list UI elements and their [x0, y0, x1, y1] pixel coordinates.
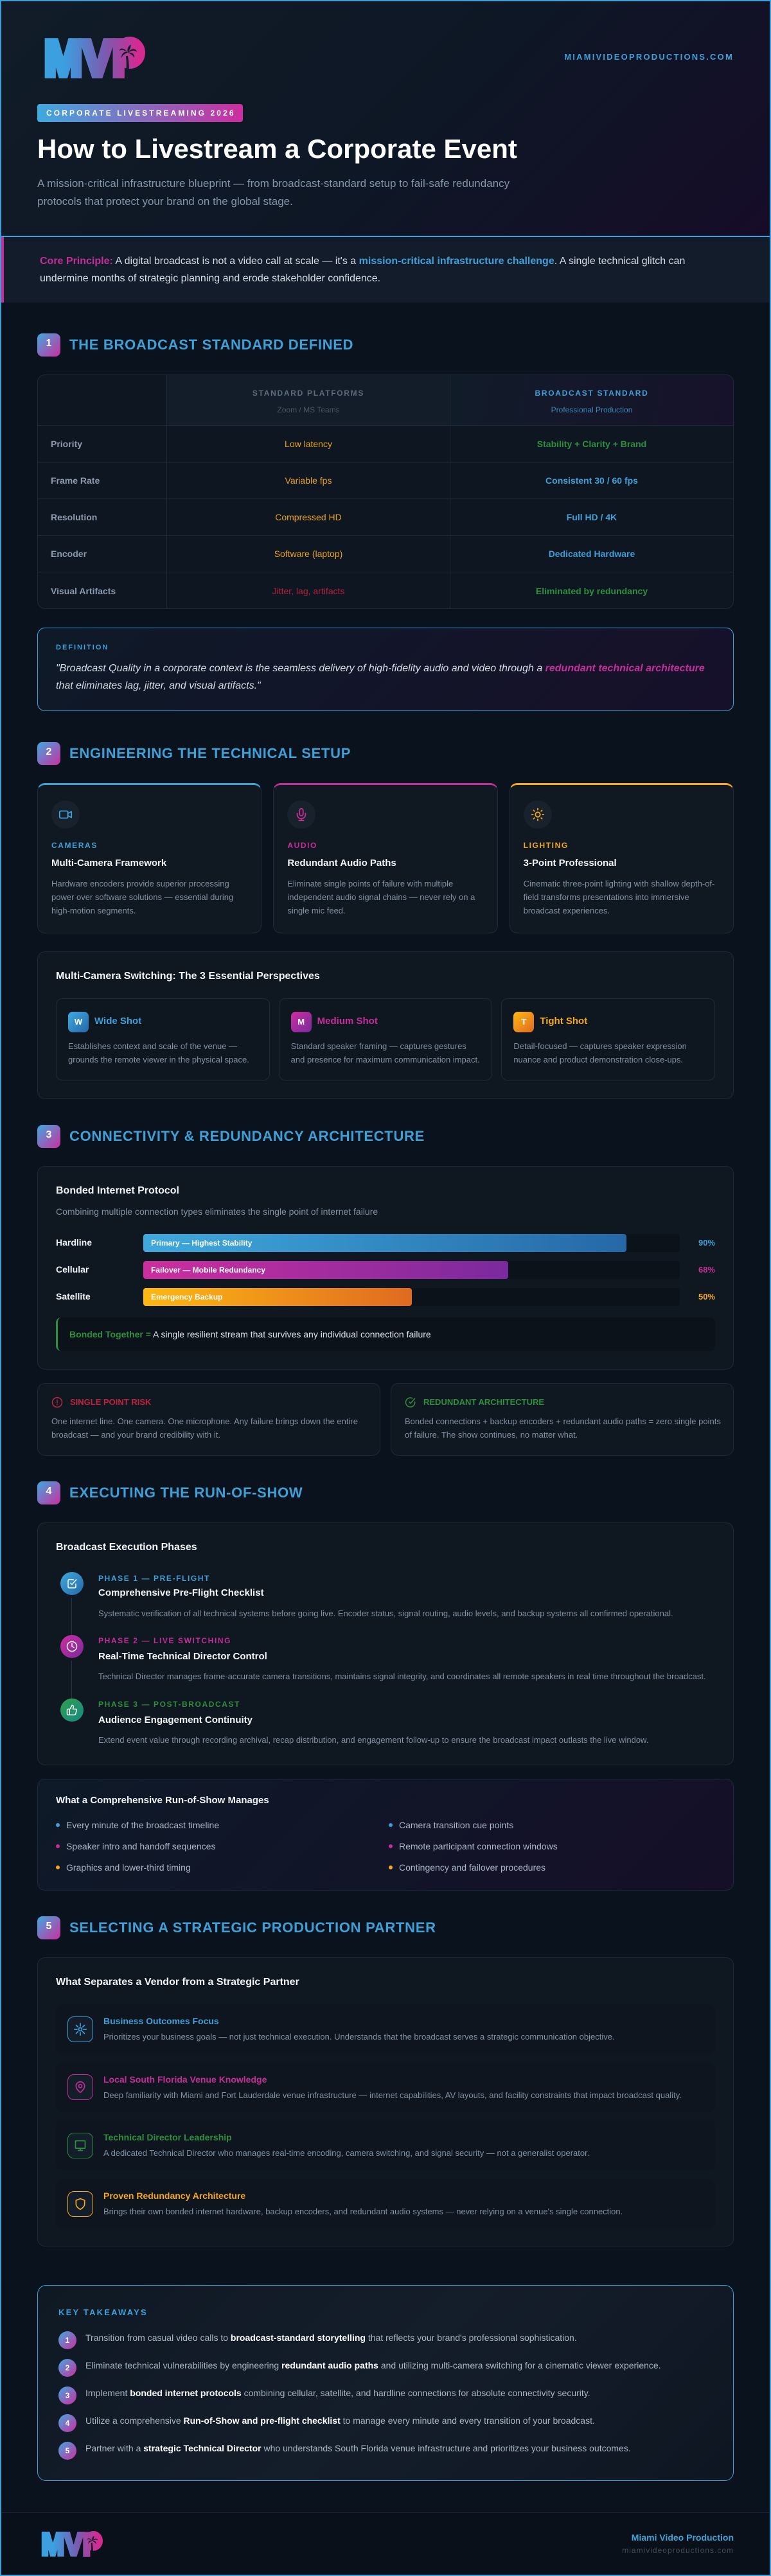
row: resolution [38, 499, 733, 536]
icon: alert [51, 1397, 63, 1408]
icon: sparkle [67, 2016, 93, 2042]
item: technical director [56, 2121, 715, 2170]
shot description [513, 1041, 687, 1064]
number [58, 2331, 76, 2349]
section heading: CONNECTIVITY & REDUNDANCY ARCHITECTURE [69, 1128, 425, 1144]
card: redundant architecture [391, 1383, 734, 1456]
phase description: Extend event value through recording archival, recap distribution, and engagement follow-up to ensure the broadcast impact outlasts the live window. [98, 1735, 648, 1745]
item: Speaker intro and handoff sequences [66, 1841, 215, 1851]
phase description: Systematic verification of all technical systems before going live. Encoder status, signal routing, audio levels, and backup systems all confirmed operational. [98, 1609, 673, 1618]
definition text: "Broadcast Quality in a corporate context is the seamless delivery of high-fidelity audio and video through a redundant technical architecture [56, 663, 705, 674]
key takeaways [37, 2285, 734, 2481]
phase title: Real-Time Technical Director Control [98, 1651, 267, 1662]
definition text [56, 663, 705, 691]
card: audio [273, 783, 498, 933]
description: single mic feed. [287, 906, 346, 915]
website address: MIAMIVIDEOPRODUCTIONS.COM [564, 52, 734, 62]
text: Implement bonded internet protocols combining cellular, satellite, and hardline connections for absolute connectivity security. [85, 2388, 590, 2398]
card: lighting [510, 783, 734, 933]
phase title: Audience Engagement Continuity [98, 1715, 253, 1725]
item title: Business Outcomes Focus [103, 2016, 219, 2026]
phase 3 [60, 1698, 648, 1745]
comparison table [37, 375, 734, 609]
bar: hardline: Primary — Highest Stability [151, 1239, 252, 1248]
row: visual artifacts [51, 572, 648, 608]
takeaways heading: KEY TAKEAWAYS [58, 2307, 148, 2317]
icon tile M [291, 1012, 312, 1032]
shot description: Detail-focused — captures speaker expression [513, 1041, 687, 1051]
row: visual artifacts: Eliminated by redundancy [536, 586, 648, 596]
shot description: grounds the remote viewer in the physical space. [68, 1055, 249, 1064]
bar: cellular: 68% [698, 1265, 715, 1275]
row: encoder [38, 536, 733, 572]
row: priority: Stability + Clarity + Brand [537, 439, 646, 449]
card text: of failure. The show continues, no matter what. [405, 1430, 578, 1440]
badge [37, 104, 243, 122]
panel title: Multi-Camera Switching: The 3 Essential Perspectives [56, 971, 320, 982]
item description: Brings their own bonded internet hardware, backup encoders, and redundant audio systems — never relying on a venue's single connection. [103, 2207, 623, 2216]
section 4: run-of-show [37, 1481, 734, 1891]
subtitle: A mission-critical infrastructure blueprint — from broadcast-standard setup to fail-safe redundancy [37, 177, 510, 190]
card text: One internet line. One camera. One microphone. Any failure brings down the entire [51, 1416, 358, 1426]
section heading: THE BROADCAST STANDARD DEFINED [69, 337, 353, 353]
item: Remote participant connection windows [399, 1841, 558, 1851]
panel: bonded internet [37, 1166, 734, 1370]
item description: Deep familiarity with Miami and Fort Lauderdale venue infrastructure — internet capabilities, AV layouts, and facility constraints that impact broadcast quality. [103, 2090, 682, 2100]
title: 3-Point Professional [524, 858, 617, 869]
number: 5 [66, 2446, 69, 2455]
section 1: broadcast standard [37, 333, 734, 711]
text: Eliminate technical vulnerabilities by engineering redundant audio paths and utilizing multi-camera switching for a cinematic viewer experience. [85, 2360, 661, 2370]
row: resolution: Full HD / 4K [567, 512, 617, 522]
header [0, 0, 771, 237]
icon tile W: W [75, 1017, 82, 1027]
bar: satellite [56, 1288, 715, 1306]
row: frame rate: Consistent 30 / 60 fps [545, 475, 638, 486]
icon: camera [51, 800, 80, 829]
section number: 5 [46, 1921, 51, 1932]
table header row: BROADCAST STANDARD [535, 389, 649, 398]
label: CAMERAS [51, 841, 98, 850]
row: priority: Priority [51, 439, 82, 449]
number: 4 [66, 2419, 69, 2428]
item title: Technical Director Leadership [103, 2132, 232, 2142]
number [58, 2414, 76, 2432]
section number: 1 [46, 338, 51, 349]
row: frame rate [38, 463, 733, 499]
definition label: DEFINITION [56, 644, 109, 651]
bonded note [56, 1318, 715, 1351]
section number: 2 [46, 746, 51, 757]
icon: checkbox [60, 1572, 84, 1595]
section number [37, 1916, 60, 1939]
icon tile M: M [297, 1017, 305, 1027]
row: priority [38, 426, 733, 463]
row: encoder: Dedicated Hardware [549, 549, 635, 559]
panel: vendor vs partner [37, 1957, 734, 2246]
description: power over software solutions — essential during [51, 892, 233, 902]
bar: cellular: Failover — Mobile Redundancy [151, 1266, 265, 1275]
section number: 3 [46, 1129, 51, 1140]
shot description: and presence for maximum communication impact. [291, 1055, 480, 1064]
description: high-motion segments. [51, 906, 136, 915]
item: Every minute of the broadcast timeline [66, 1820, 219, 1830]
shot name: Medium Shot [317, 1016, 378, 1027]
number: 1 [66, 2336, 69, 2345]
timeline connector 1 [71, 1598, 72, 1635]
list: right column [389, 1820, 558, 1873]
takeaway 1 [58, 2331, 577, 2349]
row: visual artifacts: Jitter, lag, artifacts [272, 586, 344, 596]
row: encoder: Encoder [51, 549, 87, 559]
description [51, 879, 233, 915]
panel: run-of-show manages [37, 1779, 734, 1891]
panel title: What a Comprehensive Run-of-Show Manages [56, 1795, 269, 1806]
phase label: PHASE 2 — LIVE SWITCHING [98, 1636, 231, 1645]
footer brand name: Miami Video Production [632, 2532, 734, 2543]
section heading: EXECUTING THE RUN-OF-SHOW [69, 1485, 303, 1501]
description [523, 879, 714, 915]
timeline connector 2 [71, 1661, 72, 1698]
description: Eliminate single points of failure with multiple [287, 879, 453, 888]
bar: cellular [56, 1261, 715, 1279]
row: priority: Low latency [285, 439, 332, 449]
shot description [291, 1041, 480, 1064]
item: Camera transition cue points [399, 1820, 513, 1830]
title: How to Livestream a Corporate Event [37, 134, 517, 164]
footer address: miamivideoproductions.com [622, 2546, 734, 2555]
row: frame rate: Variable fps [285, 475, 332, 486]
number [58, 2359, 76, 2377]
takeaway 5 [58, 2442, 701, 2460]
table header row: STANDARD PLATFORMS [253, 389, 364, 398]
icon: sun [524, 800, 552, 829]
definition text: that eliminates lag, jitter, and visual artifacts." [56, 680, 261, 691]
bar: hardline: 90% [698, 1238, 715, 1248]
badge: CORPORATE LIVESTREAMING 2026 [46, 109, 236, 118]
item title: Proven Redundancy Architecture [103, 2191, 245, 2201]
label: AUDIO [287, 841, 317, 850]
card label: SINGLE POINT RISK [70, 1397, 151, 1407]
icon tile W [68, 1012, 89, 1032]
icon tile T [513, 1012, 534, 1032]
phase label: PHASE 1 — PRE-FLIGHT [98, 1574, 210, 1583]
bar: satellite: Satellite [56, 1291, 91, 1301]
description: independent audio signal chains — never rely on a [287, 892, 475, 902]
item: Graphics and lower-third timing [66, 1862, 191, 1873]
item: Contingency and failover procedures [399, 1862, 545, 1873]
section 2: technical setup [37, 742, 734, 1099]
bar: cellular: Cellular [56, 1264, 89, 1275]
item description: A dedicated Technical Director who manages real-time encoding, camera switching, and signal security — not a generalist operator. [103, 2148, 589, 2158]
section number [37, 742, 60, 765]
panel title: What Separates a Vendor from a Strategic Partner [56, 1977, 299, 1988]
takeaway 2 [58, 2359, 661, 2377]
row: resolution: Compressed HD [275, 512, 342, 522]
section number [37, 1125, 60, 1148]
panel subtitle: Combining multiple connection types eliminates the single point of internet failure [56, 1206, 378, 1217]
panel: execution phases [37, 1522, 734, 1765]
footer [0, 2512, 771, 2576]
label: LIGHTING [524, 841, 569, 850]
bar: hardline [56, 1234, 715, 1252]
shot name: Wide Shot [94, 1016, 141, 1027]
section 3: connectivity [37, 1125, 734, 1456]
icon: shield [67, 2191, 93, 2217]
icon: check [405, 1397, 415, 1407]
shot description: Establishes context and scale of the venue — [68, 1041, 237, 1051]
subtitle: protocols that protect your brand on the global stage. [37, 195, 293, 207]
card: cameras [37, 783, 261, 933]
phase description: Technical Director manages frame-accurate camera transitions, maintains signal integrity, and coordinates all remote speakers in real time throughout the broadcast. [98, 1672, 706, 1681]
shot description: nuance and product demonstration close-ups. [513, 1055, 683, 1064]
table header row: Professional Production [551, 405, 632, 414]
panel: multi-camera switching [37, 951, 734, 1099]
callout: core principle: Core Principle: A digital broadcast is not a video call at scale — it's a mission-critical infrastructure challenge. A single technical glitch can [40, 256, 685, 267]
card text: broadcast — and your brand credibility with it. [51, 1430, 220, 1440]
description: broadcast experiences. [524, 906, 610, 915]
icon: monitor [67, 2133, 93, 2158]
phase 2 [60, 1635, 706, 1681]
number [58, 2386, 76, 2404]
takeaway 3 [58, 2386, 590, 2404]
takeaway 4 [58, 2414, 701, 2432]
card text [51, 1416, 358, 1440]
item description: Prioritizes your business goals — not just technical execution. Understands that the broadcast serves a strategic communication objective. [103, 2032, 615, 2042]
section heading: ENGINEERING THE TECHNICAL SETUP [69, 745, 351, 761]
card text [405, 1416, 721, 1440]
bar: satellite: 50% [698, 1292, 715, 1301]
shot card: medium [279, 998, 492, 1081]
row: frame rate: Frame Rate [51, 475, 100, 486]
row: visual artifacts: Visual Artifacts [51, 586, 116, 596]
callout: core principle: undermine months of strategic planning and erode stakeholder confidence. [40, 273, 380, 284]
description [287, 879, 475, 915]
title: Redundant Audio Paths [287, 858, 396, 869]
section number: 4 [46, 1486, 51, 1497]
number: 3 [66, 2391, 69, 2400]
icon: thumbs up [60, 1698, 84, 1722]
panel title: Bonded Internet Protocol [56, 1185, 179, 1196]
definition box [37, 628, 734, 711]
icon: microphone [287, 800, 315, 829]
icon: map pin [67, 2074, 93, 2100]
text: Transition from casual video calls to broadcast-standard storytelling that reflects your brand's professional sophistication. [85, 2333, 577, 2343]
row: resolution: Resolution [51, 512, 97, 522]
text: Partner with a strategic Technical Director who understands South Florida venue infrastructure and prioritizes your business outcomes. [85, 2443, 631, 2453]
list: left column [56, 1820, 219, 1873]
text: Utilize a comprehensive Run-of-Show and pre-flight checklist to manage every minute and every transition of your broadcast. [85, 2415, 595, 2426]
title: Multi-Camera Framework [51, 858, 166, 869]
phase title: Comprehensive Pre-Flight Checklist [98, 1587, 264, 1598]
section heading: SELECTING A STRATEGIC PRODUCTION PARTNER [69, 1919, 436, 1936]
phase 1 [60, 1572, 673, 1618]
number [58, 2442, 76, 2460]
item: business outcomes [56, 2004, 715, 2054]
phase label: PHASE 3 — POST-BROADCAST [98, 1700, 240, 1709]
shot description [68, 1041, 249, 1064]
table header row [38, 375, 733, 426]
bonded note: Bonded Together = A single resilient stream that survives any individual connection failure [69, 1329, 431, 1339]
shot card: tight [501, 998, 715, 1081]
shot name: Tight Shot [540, 1016, 587, 1027]
section 5: production partner [37, 1916, 734, 2246]
table header row: Zoom / MS Teams [277, 405, 340, 414]
row: encoder: Software (laptop) [274, 549, 342, 559]
bar chart [56, 1234, 715, 1306]
callout: core principle [0, 237, 771, 303]
section number [37, 1481, 60, 1504]
description: Cinematic three-point lighting with shallow depth-of- [524, 879, 714, 888]
bar: satellite: Emergency Backup [151, 1292, 222, 1301]
card text: Bonded connections + backup encoders + redundant audio paths = zero single points [405, 1416, 721, 1426]
card: single point risk [37, 1383, 380, 1456]
number: 2 [66, 2363, 69, 2372]
description: field transforms presentations into immersive [524, 892, 689, 902]
item title: Local South Florida Venue Knowledge [103, 2074, 267, 2085]
item: proven redundancy [56, 2179, 715, 2228]
bar: hardline: Hardline [56, 1237, 92, 1248]
shot card: wide [56, 998, 270, 1081]
subtitle [37, 177, 510, 207]
section number [37, 333, 60, 357]
panel title: Broadcast Execution Phases [56, 1542, 197, 1553]
icon: clock [60, 1635, 84, 1658]
shot description: Standard speaker framing — captures gestures [291, 1041, 466, 1051]
card label: REDUNDANT ARCHITECTURE [423, 1397, 544, 1407]
icon tile T: T [521, 1017, 526, 1027]
description: Hardware encoders provide superior processing [51, 879, 229, 888]
item: local knowledge [56, 2063, 715, 2112]
